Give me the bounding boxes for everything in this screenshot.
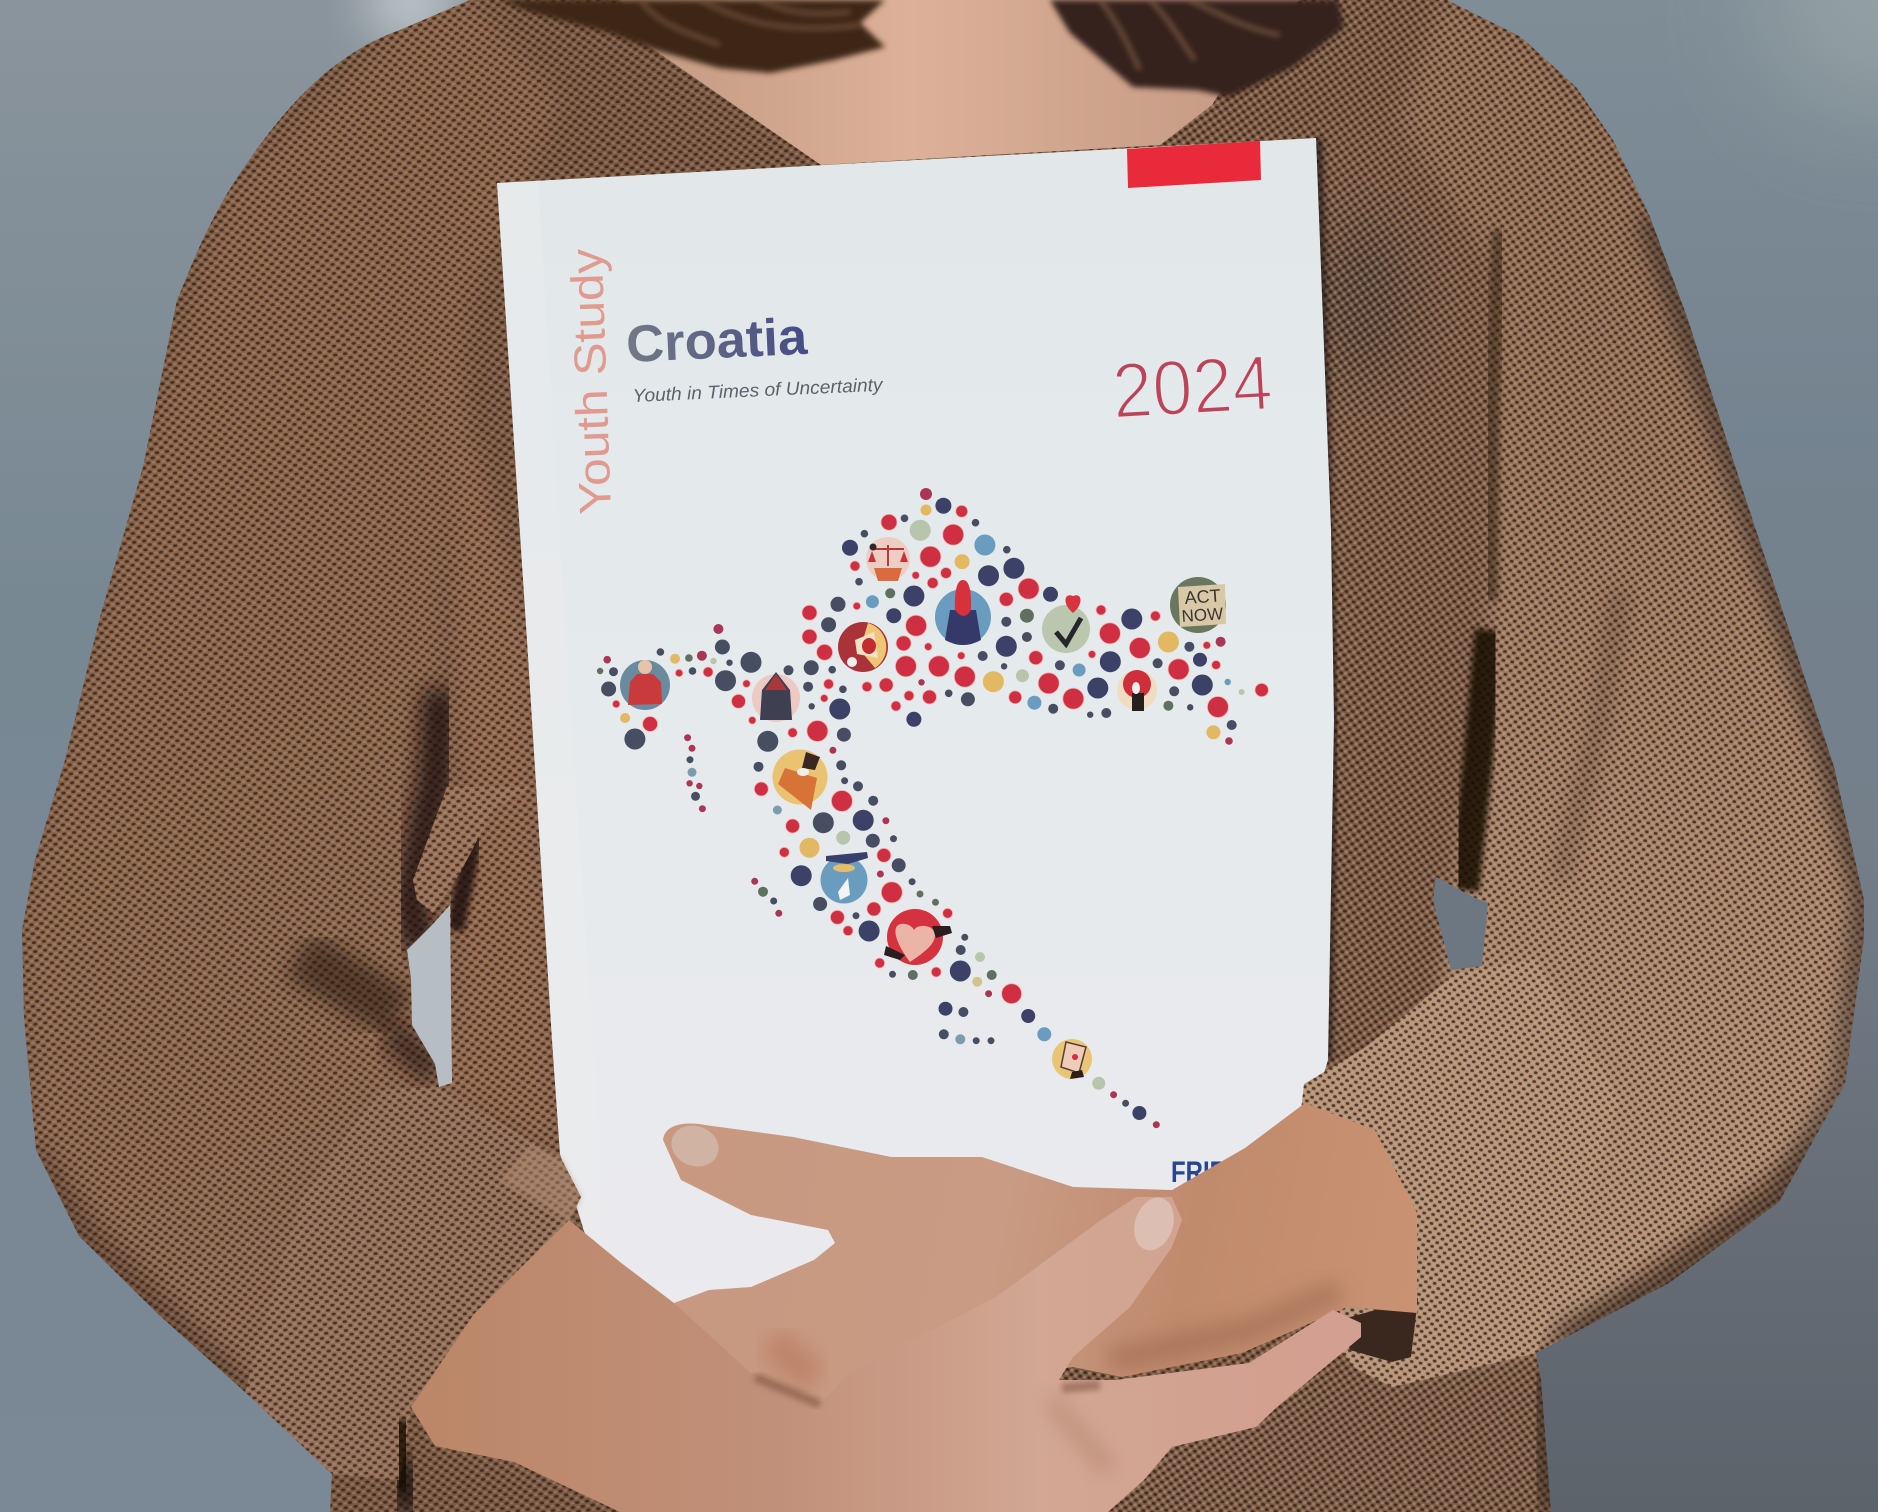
left lower sleeve with cuff (245, 1087, 581, 1490)
gap right of torso (1433, 877, 1488, 970)
publisher logo text: FRIED (1171, 1156, 1243, 1189)
subtitle: Youth in Times of Uncertainty (632, 374, 885, 406)
thumbnail (666, 1119, 724, 1173)
left sleeve shading (22, 0, 560, 1474)
icon: graduation cap (820, 852, 868, 904)
hair left (500, 0, 885, 73)
icon: checkmark (1042, 595, 1090, 653)
gap left of torso (407, 905, 452, 1087)
neck skin (620, 0, 1300, 165)
lower torso (1398, 1356, 1524, 1394)
vertical title: Youth Study: Youth Study (561, 247, 621, 515)
sweater creases (1490, 230, 1500, 600)
right lower sleeve with cuff (1300, 959, 1620, 1387)
icon: ACT NOW sign: NOW (1181, 604, 1224, 626)
icon: woman with blue background (935, 580, 991, 645)
knit texture (0, 0, 1000, 1512)
left sleeve outer shadow (36, 1150, 332, 1474)
icon: raised hand tool (1117, 670, 1157, 711)
wrist lower shadow (1110, 1290, 1340, 1360)
cuff highlight (500, 1145, 581, 1222)
left fold of sleeve (413, 787, 530, 913)
icon: megaphone (838, 622, 888, 672)
hand crease shadows (755, 1377, 1100, 1404)
right sleeve panel (1400, 0, 1864, 1390)
report cover (497, 138, 1334, 1320)
icon: scales (866, 537, 910, 581)
year 2024: 2024 (1110, 338, 1275, 435)
right sleeve outer shadow (1560, 217, 1864, 1340)
icon: hooded figure (752, 672, 800, 722)
knuckle shadow (770, 1340, 815, 1380)
icon: woman in red (620, 660, 670, 710)
lower forearm and hand (411, 1192, 1361, 1512)
icon: heart in hands (884, 909, 952, 965)
left torso panel (449, 408, 559, 1148)
shadow inside cuff (1340, 1298, 1418, 1362)
red tab (1127, 141, 1261, 188)
icon: suitcase (772, 750, 828, 810)
book shadow (1318, 138, 1334, 1060)
icon: ACT NOW sign: ACT (1184, 586, 1221, 608)
hair right (1050, 0, 1344, 97)
spine fold (497, 181, 600, 1275)
thumbnail (1128, 1192, 1180, 1256)
shadow under cuff (400, 1420, 405, 1490)
right torso dark patch (1317, 215, 1413, 385)
icon: phone with heart (1052, 1039, 1092, 1079)
dot map of Croatia (597, 488, 1268, 1128)
right torso panel (1318, 100, 1490, 1080)
icon: ACT NOW sign (1170, 577, 1226, 633)
upper hand and wrist (663, 1103, 1417, 1403)
right lower torso shadow (1540, 1370, 1551, 1512)
title: Croatia: Croatia (625, 308, 809, 374)
